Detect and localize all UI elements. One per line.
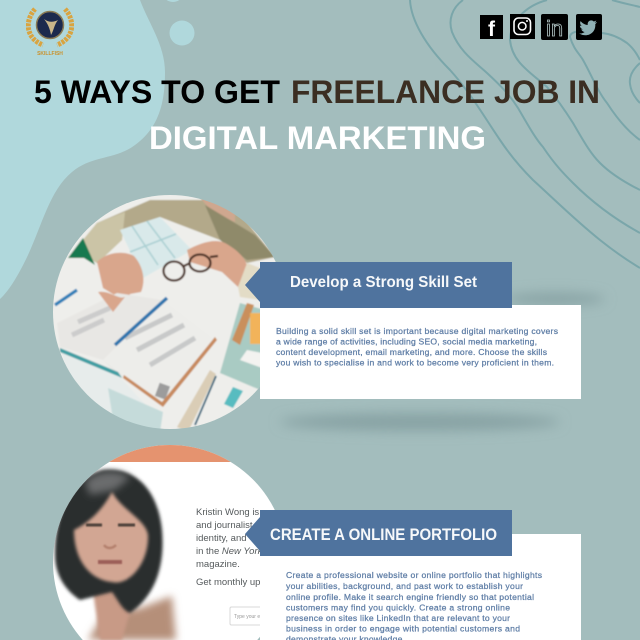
icon: facebook: f: [488, 18, 496, 41]
website text: [196, 507, 264, 588]
eyes, nose and lips: [86, 525, 135, 562]
body text: content development, email marketing, and more. Choose the skills: [276, 347, 547, 357]
body text: [286, 570, 542, 640]
face: [74, 492, 148, 582]
website text: in the New York: [196, 546, 264, 557]
portrait: [55, 470, 176, 640]
title: 5 WAYS TO GET: [34, 74, 280, 110]
sweater: [88, 596, 176, 640]
body text: Building a solid skill set is important because digital marketing covers: [276, 326, 558, 336]
body text: business in order to engage with potential customers and: [286, 624, 520, 634]
website text: Get monthly up: [196, 577, 260, 588]
book: [114, 292, 130, 312]
hair: [55, 470, 163, 613]
teal cover: [60, 348, 122, 378]
book edge: [123, 337, 217, 407]
icon: linkedin: in: [546, 16, 563, 41]
banner with arrow: [245, 262, 512, 308]
text card: [260, 305, 581, 399]
body text: you wish to specialise in and work to become very proficient in them.: [276, 358, 554, 368]
pencil: [115, 298, 167, 345]
body text: [276, 326, 558, 368]
social icons: [480, 14, 602, 41]
website input box: [230, 607, 264, 625]
text card: [260, 534, 581, 640]
body text: presence on sites like LinkedIn that are relevant to your: [286, 613, 510, 623]
body text: online profile. Make it search engine friendly so that potential: [286, 592, 534, 602]
banner heading: Develop a Strong Skill Set: [290, 274, 478, 291]
panel: online portfolio: [245, 510, 581, 640]
website text: Kristin Wong is: [196, 507, 259, 518]
panel: develop skill set: [245, 262, 581, 399]
website text: magazine.: [196, 559, 240, 570]
left pen: [55, 290, 77, 305]
striped sheet: [102, 368, 120, 376]
neck: [92, 590, 129, 640]
website input box: Type your e: [234, 614, 260, 620]
photo: portrait on website page: [50, 440, 290, 640]
shirt and sleeves: [83, 200, 275, 263]
right hand: [187, 241, 247, 287]
orange header band: [110, 445, 230, 462]
body text: customers may find you quickly. Create a strong online: [286, 602, 510, 612]
banner with arrow: [245, 510, 512, 556]
banner heading: CREATE A ONLINE PORTFOLIO: [270, 526, 497, 544]
decorative circles: [162, 0, 194, 46]
logo: SKILLFISH: [37, 51, 63, 57]
green folder: [220, 302, 260, 390]
body text: Create a professional website or online portfolio that highlights: [286, 570, 542, 580]
title: [34, 74, 600, 156]
left hand: [96, 252, 144, 296]
grid paper: [120, 217, 192, 278]
logo: [28, 9, 72, 57]
website text: identity, and: [196, 533, 247, 544]
contour lines: [410, 0, 640, 268]
title: FREELANCE JOB IN: [291, 74, 600, 110]
title: DIGITAL MARKETING: [149, 120, 486, 156]
notebook: [177, 370, 216, 432]
photo: desk with open book and glasses: [53, 195, 276, 429]
shadows under panel one: [280, 293, 605, 431]
background blob: [0, 0, 165, 299]
icon: twitter: [576, 14, 602, 40]
green object: [68, 238, 95, 265]
icon: instagram: [510, 14, 535, 39]
glasses: [164, 254, 218, 280]
body text: your abilities, background, and past work to establish your: [286, 581, 523, 591]
body text: a wide range of activities, including SEO, social media marketing,: [276, 336, 537, 346]
website text: and journalist w: [196, 520, 262, 531]
